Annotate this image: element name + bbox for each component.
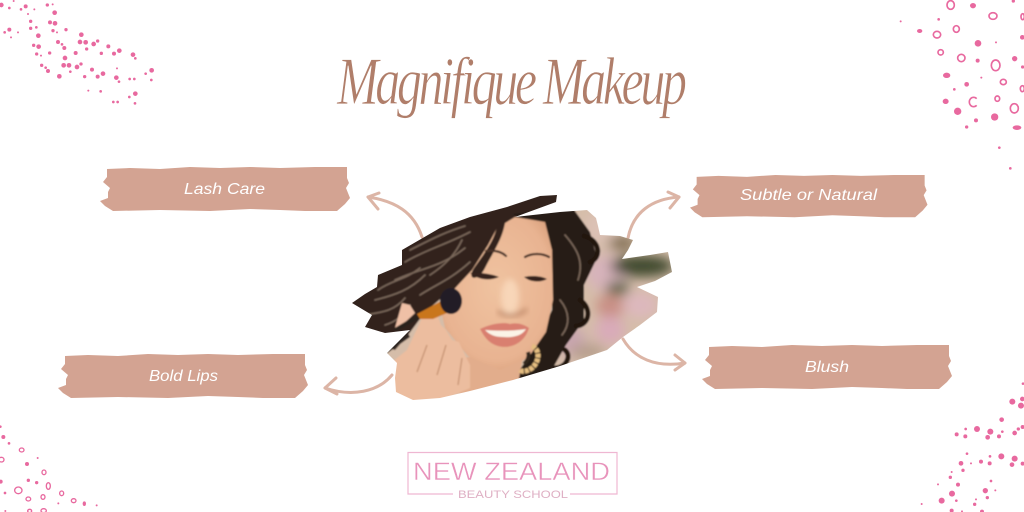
ribbon: Blush: Blush (805, 359, 849, 376)
hair strand over forehead (470, 222, 506, 279)
photo background: blurred flowers (387, 210, 672, 395)
ribbon: Lash Care: Lash Care (184, 181, 265, 198)
arrow: to Subtle or Natural (628, 192, 679, 238)
ribbon: Bold Lips (58, 354, 308, 398)
decoration: bottom-left pink rings (0, 425, 98, 512)
ribbon: Subtle or Natural: Subtle or Natural (740, 187, 878, 204)
photo: woman applying makeup in a brush-stroke mask (352, 195, 672, 400)
decoration: top-right pink rings (900, 0, 1024, 170)
ribbon: Blush (702, 345, 952, 389)
thumb (395, 303, 415, 328)
mouth (480, 323, 529, 347)
hair (352, 195, 602, 378)
arrow: to Blush (623, 339, 685, 370)
face (440, 217, 553, 370)
ribbon: Lash Care (100, 167, 350, 211)
arrow: to Lash Care (368, 193, 422, 237)
eyebrows (486, 251, 549, 257)
eyes (470, 273, 547, 281)
finger lines (417, 345, 462, 385)
title: Magnifique Makeup (336, 44, 687, 119)
decoration: bottom-right pink dots (921, 382, 1024, 512)
neck and shoulder (460, 356, 522, 394)
hand (394, 317, 470, 400)
ribbon: Bold Lips: Bold Lips (149, 368, 218, 385)
makeup brush (386, 288, 462, 354)
ribbon: Subtle or Natural (690, 175, 928, 217)
logo: New Zealand Beauty School (408, 452, 617, 501)
nose (498, 279, 527, 315)
logo: New Zealand Beauty School: NEW ZEALAND (413, 458, 610, 486)
earring (520, 346, 538, 371)
logo: New Zealand Beauty School: BEAUTY SCHOOL (458, 489, 568, 501)
arrow: to Bold Lips (325, 375, 392, 394)
decoration: top-left pink dots (0, 0, 154, 105)
